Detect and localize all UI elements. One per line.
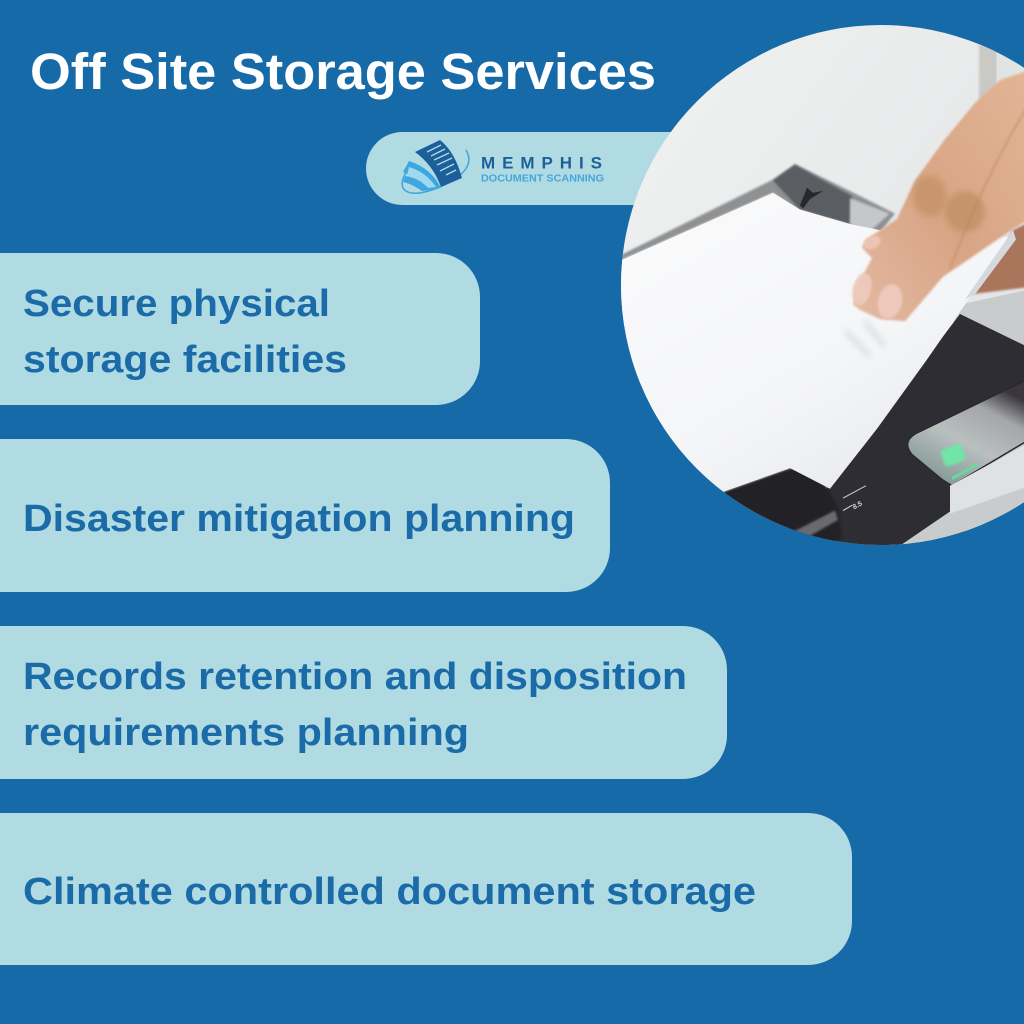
text: secure physical storage facilities: storage facilities [23, 339, 347, 381]
text: records retention and disposition requirements planning: Records retention and disposition [23, 656, 687, 698]
panel: records retention [0, 626, 727, 779]
text: climate controlled document storage: Climate controlled document storage [23, 871, 756, 913]
logo wordmark [481, 154, 604, 184]
photo: hand feeding paper into scanner: 8.5 [851, 499, 864, 511]
logo wordmark: MEMPHIS [481, 154, 602, 172]
icon: document scanning logo [402, 140, 469, 193]
photo: hand feeding paper into scanner [621, 25, 1024, 545]
text: secure physical storage facilities: Secure physical [23, 283, 330, 325]
logo wordmark: DOCUMENT SCANNING [481, 172, 604, 184]
panel: disaster mitigation [0, 439, 610, 592]
text: records retention and disposition requirements planning: requirements planning [23, 712, 469, 754]
text: records retention and disposition requirements planning [23, 656, 687, 754]
panel: climate controlled [0, 813, 852, 965]
panel: secure physical storage [0, 253, 480, 405]
text: disaster mitigation planning: Disaster mitigation planning [23, 498, 575, 540]
panel: logo pill [366, 132, 706, 205]
text: secure physical storage facilities [23, 283, 347, 381]
title: Off Site Storage Services [30, 43, 656, 100]
